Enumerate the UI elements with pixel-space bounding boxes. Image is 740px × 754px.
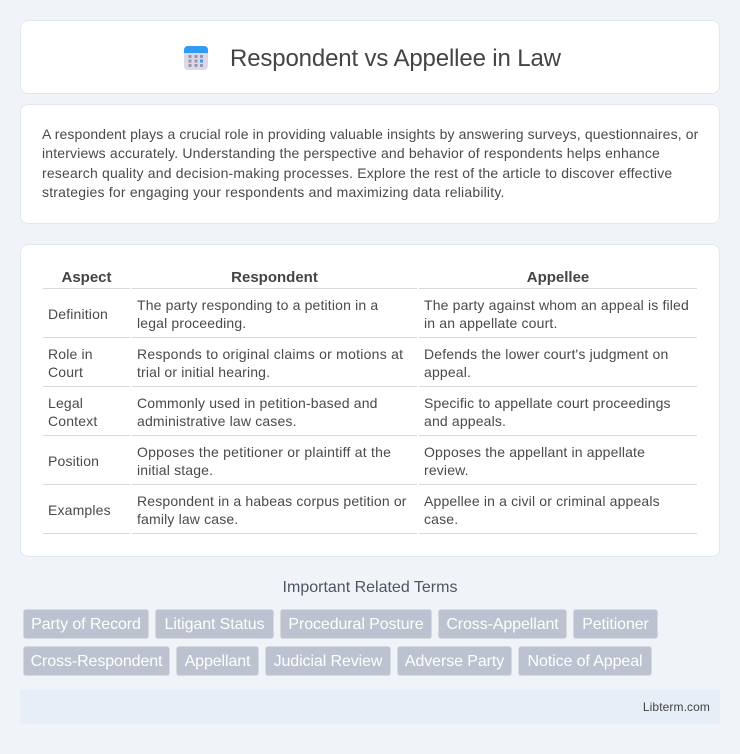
row: Position: initial stage. xyxy=(137,462,213,478)
row: Role in Court: Responds to original claims or motions at xyxy=(137,346,403,362)
row: Examples: Examples xyxy=(48,502,111,518)
row: Role in Court: Court xyxy=(48,364,83,380)
intro text: strategies for engaging your respondents and maximizing data reliability. xyxy=(42,184,505,200)
tag: Party of Record xyxy=(31,616,141,633)
tag xyxy=(176,646,259,676)
comparison table xyxy=(43,269,697,534)
tag xyxy=(265,646,391,676)
tag xyxy=(397,646,512,676)
row: Examples: Respondent in a habeas corpus petition or xyxy=(137,493,407,509)
row: Definition: in an appellate court. xyxy=(424,315,558,331)
tag xyxy=(518,646,652,676)
intro text: interviews accurately. Understanding the perspective and behavior of respondents helps enhance xyxy=(42,145,660,161)
row: Position: Opposes the appellant in appellate xyxy=(424,444,645,460)
row: Legal Context: Specific to appellate court proceedings xyxy=(424,395,671,411)
row: Position: Position xyxy=(48,453,99,469)
footer credit: Libterm.com xyxy=(643,700,710,714)
row: Definition: legal proceeding. xyxy=(137,315,246,331)
table header xyxy=(61,269,589,286)
row: Role in Court: appeal. xyxy=(424,364,471,380)
tag: Notice of Appeal xyxy=(528,653,642,670)
tag xyxy=(573,609,658,639)
row: Role in Court: trial or initial hearing. xyxy=(137,364,270,380)
tag xyxy=(23,609,149,639)
row: Definition: The party against whom an appeal is filed xyxy=(424,297,689,313)
row: Legal Context: administrative law cases. xyxy=(137,413,297,429)
row: Legal Context: Context xyxy=(48,413,97,429)
tag: Cross-Appellant xyxy=(446,616,559,633)
row: Examples xyxy=(48,493,660,527)
tag: Litigant Status xyxy=(165,616,264,633)
footer bar xyxy=(20,690,720,724)
panel: comparison table xyxy=(20,244,720,557)
tag xyxy=(155,609,274,639)
icon: calendar xyxy=(184,46,208,70)
tag: Procedural Posture xyxy=(288,616,424,633)
title: Respondent vs Appellee in Law xyxy=(230,45,561,72)
related terms tags xyxy=(23,609,658,676)
tag xyxy=(23,646,170,676)
row: Examples: Appellee in a civil or criminal appeals xyxy=(424,493,660,509)
row: Role in Court: Role in xyxy=(48,346,93,362)
intro text: A respondent plays a crucial role in providing valuable insights by answering surveys, questionnaires, or xyxy=(42,126,698,142)
row: Examples: family law case. xyxy=(137,511,238,527)
row: Legal Context xyxy=(48,395,671,429)
tag: Petitioner xyxy=(582,616,649,633)
row: Position: Opposes the petitioner or plaintiff at the xyxy=(137,444,391,460)
heading: related terms: Important Related Terms xyxy=(283,579,457,596)
tag: Appellant xyxy=(185,653,250,670)
row: Role in Court: Defends the lower court's judgment on xyxy=(424,346,668,362)
row: Examples: case. xyxy=(424,511,458,527)
row: Definition xyxy=(48,297,689,331)
tag: Cross-Respondent xyxy=(31,653,162,670)
table header: Respondent xyxy=(231,269,318,286)
row: Role in Court xyxy=(48,346,668,380)
intro text: research quality and decision-making processes. Explore the rest of the article to discover effective xyxy=(42,165,672,181)
row: Position xyxy=(48,444,645,478)
row: Legal Context: Legal xyxy=(48,395,83,411)
tag: Adverse Party xyxy=(405,653,504,670)
row: Definition: Definition xyxy=(48,306,108,322)
table header: Aspect xyxy=(61,269,112,286)
tag xyxy=(280,609,432,639)
row: Legal Context: and appeals. xyxy=(424,413,506,429)
row: Position: review. xyxy=(424,462,469,478)
tag: Judicial Review xyxy=(274,653,382,670)
panel: header xyxy=(20,20,720,94)
row: Definition: The party responding to a petition in a xyxy=(137,297,378,313)
tag xyxy=(438,609,567,639)
intro text xyxy=(42,126,698,200)
table header: Appellee xyxy=(527,269,589,286)
row: Legal Context: Commonly used in petition-based and xyxy=(137,395,378,411)
panel: introduction xyxy=(20,104,720,224)
